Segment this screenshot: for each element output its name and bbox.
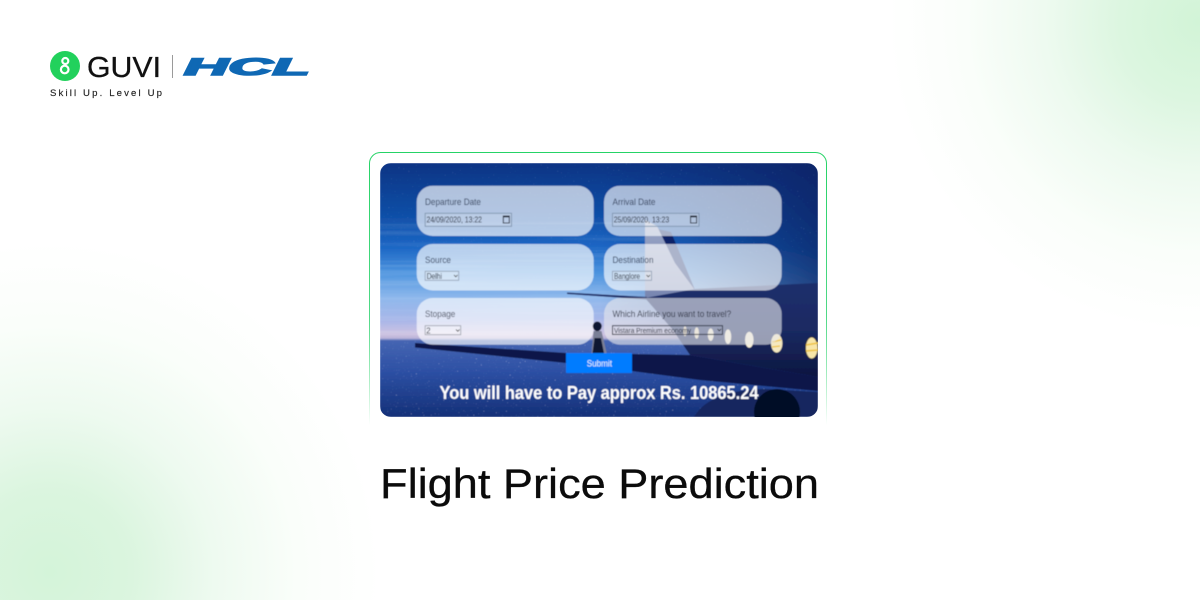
form card: destination: Destination — [612, 255, 654, 265]
figure: girl on wing — [592, 322, 607, 353]
screenshot frame — [369, 152, 827, 425]
select: Vistara Premium economy: Vistara Premium economy — [614, 326, 691, 335]
icon: GUVI green circle — [50, 51, 80, 81]
form card: destination — [604, 244, 782, 290]
GUVI wordmark: GUVI — [87, 52, 161, 84]
form card: source — [417, 244, 594, 290]
form card: airline — [604, 298, 782, 345]
airplane engine housing — [694, 389, 818, 417]
sky streaks — [380, 222, 644, 292]
airplane engine — [754, 388, 800, 417]
select: Banglore: Banglore — [614, 272, 640, 281]
form card: airline: Which Airline you want to travel? — [612, 309, 731, 319]
form card: arrival date — [604, 186, 782, 236]
airplane windows — [683, 326, 818, 359]
select: 2 — [425, 326, 461, 335]
sky stars — [380, 163, 818, 253]
background glow: top right — [880, 0, 1200, 340]
title: Flight Price Prediction — [380, 460, 819, 507]
tagline: Skill Up. Level Up — [50, 88, 162, 99]
select: Delhi — [425, 271, 459, 281]
airplane rear wing — [567, 292, 647, 300]
airplane fuselage — [645, 283, 818, 377]
select: Delhi: Delhi — [427, 272, 442, 281]
form card: arrival date: Arrival Date — [612, 197, 656, 207]
date input: 25/09/2020, 13:23 — [614, 216, 670, 225]
form card: departure date — [417, 186, 594, 236]
logo: GUVI and HCL — [50, 51, 310, 99]
airplane fin dark edge — [657, 229, 695, 290]
date input: 24/09/2020, 13:22 — [426, 216, 482, 225]
submit button: Submit — [587, 358, 612, 368]
form card: stopage — [417, 298, 594, 345]
form card: source: Source — [425, 255, 451, 265]
HCL wordmark: HCL — [184, 55, 310, 81]
airplane tail fin — [645, 220, 695, 298]
submit button — [566, 353, 632, 373]
select: 2: 2 — [426, 326, 431, 335]
background glow: bottom left — [0, 240, 385, 600]
logo divider — [172, 55, 173, 78]
date input — [612, 213, 699, 226]
prediction result: You will have to Pay approx Rs. 10865.24 — [440, 382, 759, 403]
form card: stopage: Stopage — [425, 309, 455, 319]
sky and sea background — [380, 163, 818, 417]
screenshot: flight price app — [380, 163, 818, 435]
date input — [425, 213, 512, 226]
airplane main wing — [415, 343, 818, 391]
form card: departure date: Departure Date — [425, 197, 481, 207]
sea speckles — [380, 341, 818, 417]
